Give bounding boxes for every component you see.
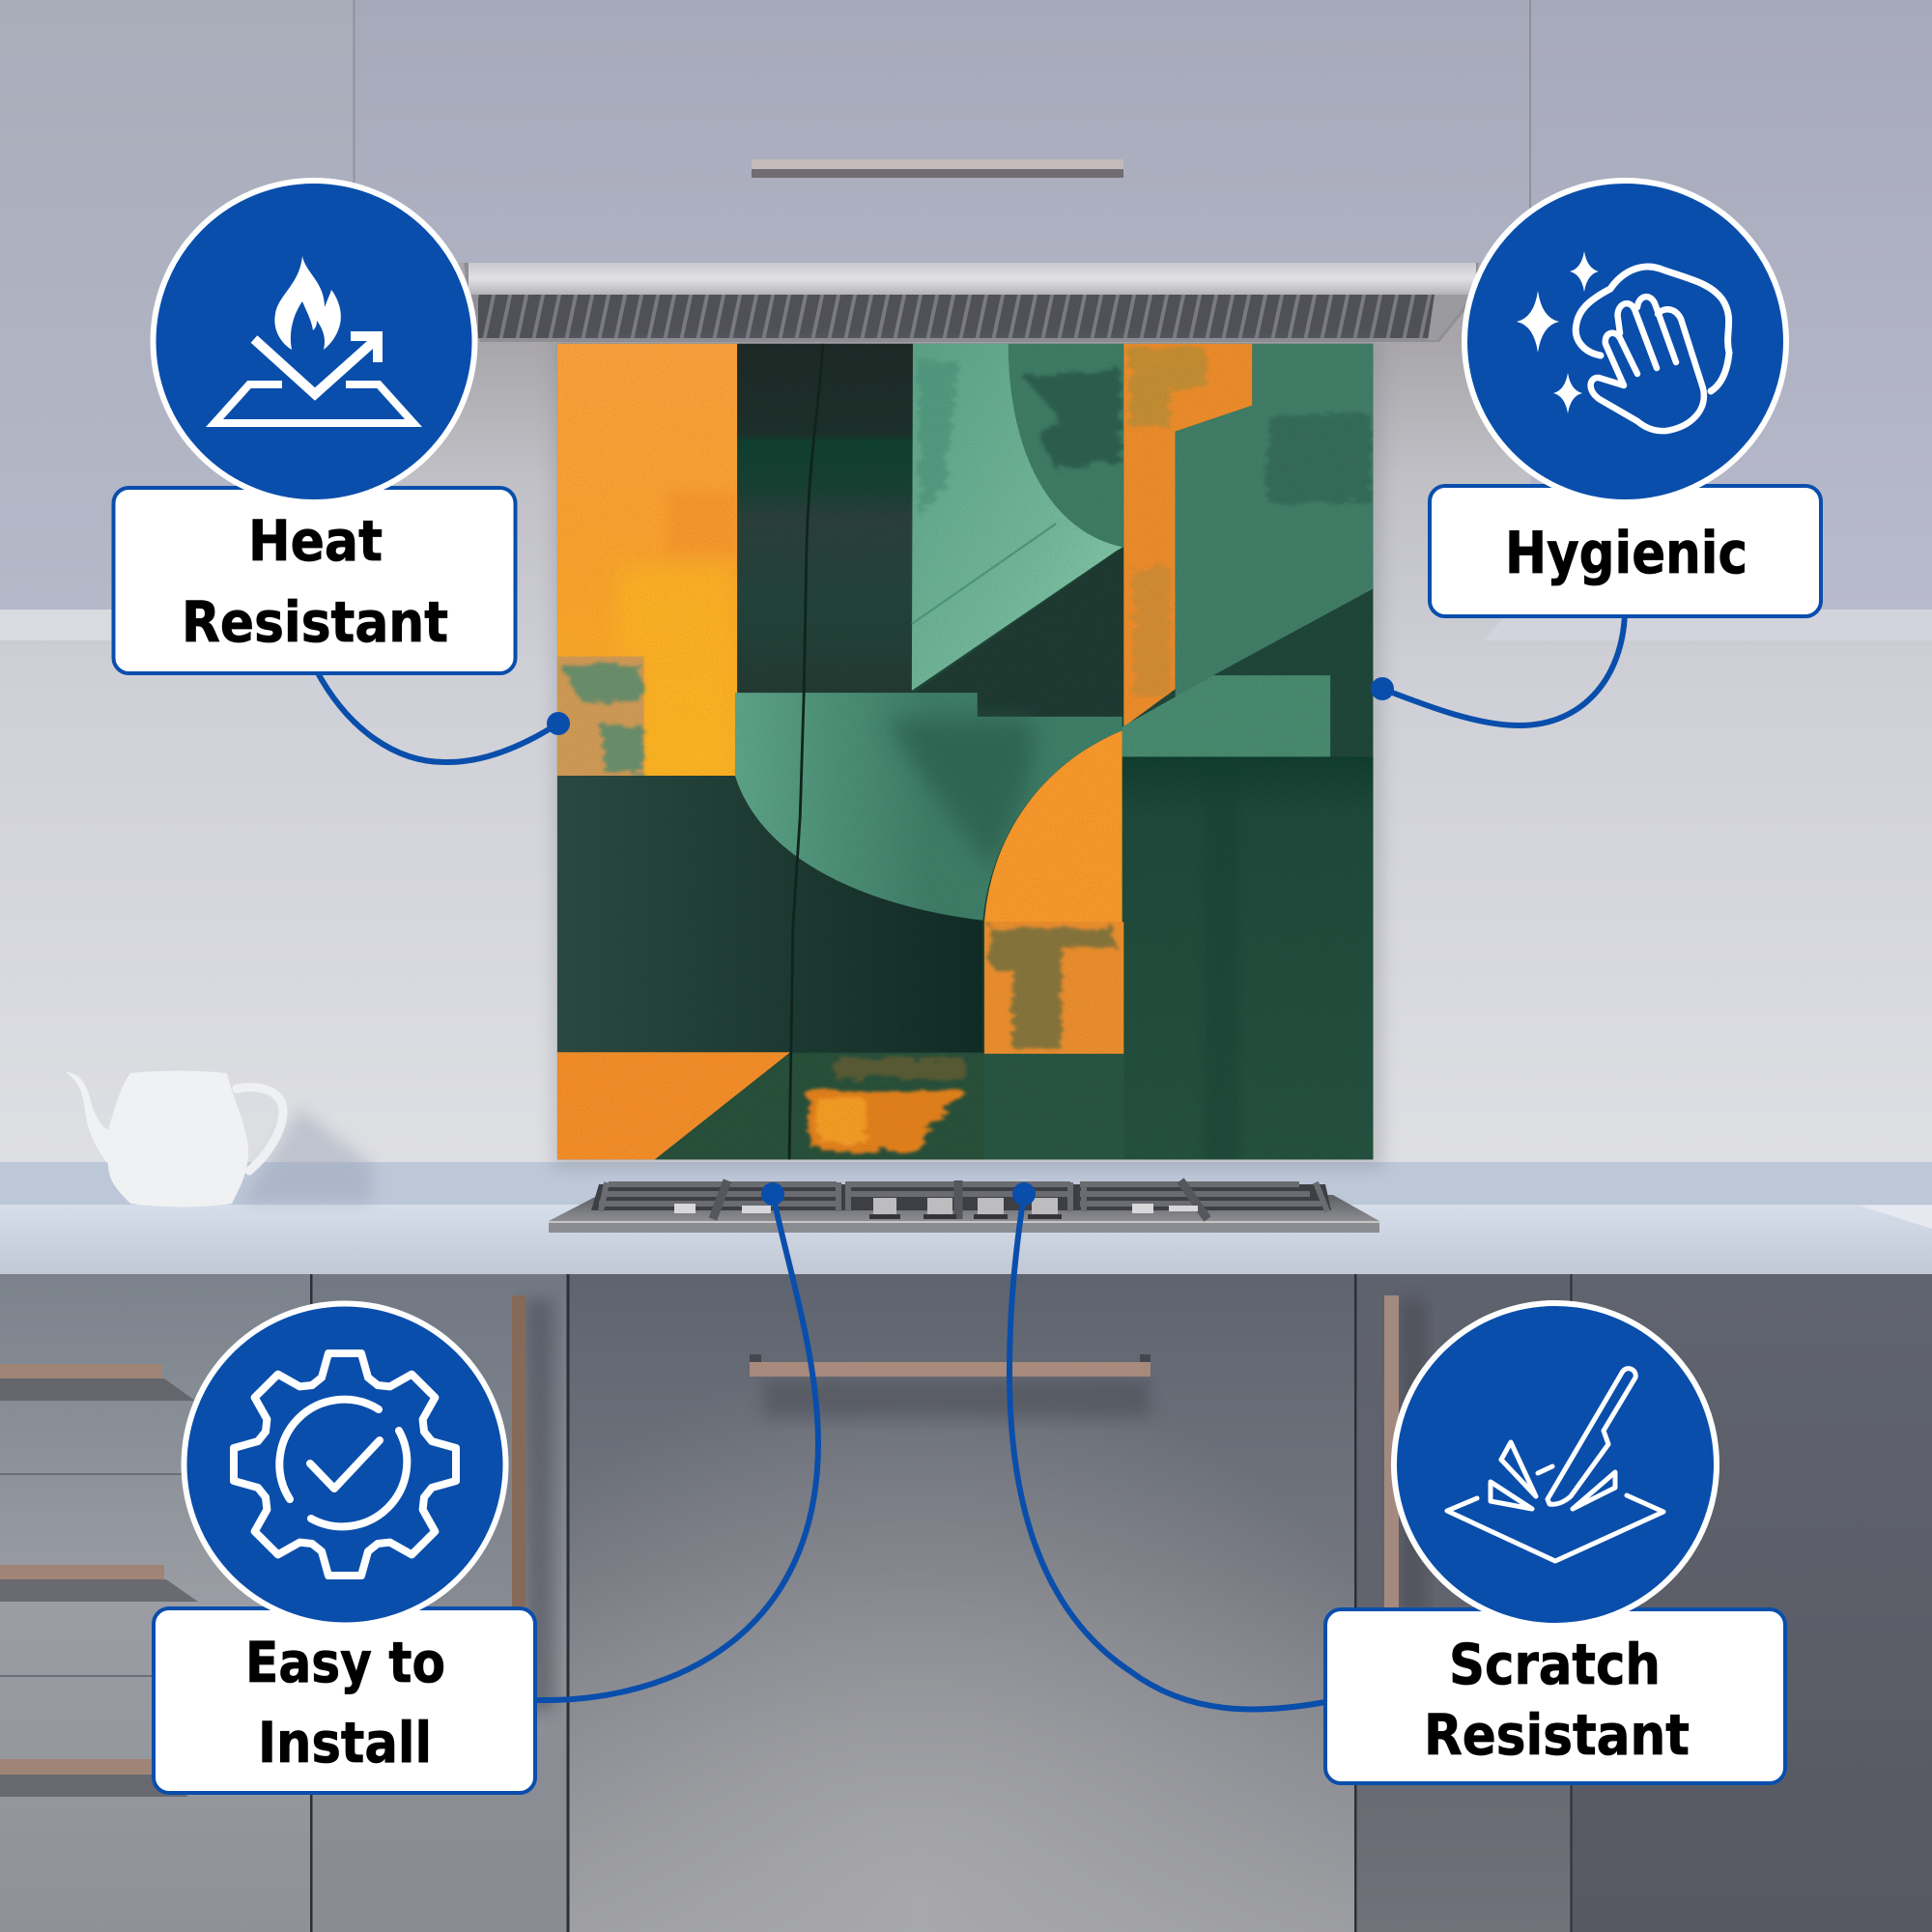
right lower shadow band xyxy=(1205,779,1237,1159)
label text: Resistant xyxy=(1424,1702,1690,1768)
wall xyxy=(0,263,1932,1190)
counter corner highlight xyxy=(1860,1206,1932,1229)
centre grate xyxy=(845,1180,1072,1219)
label text: Easy to xyxy=(245,1630,445,1695)
strip green scuff xyxy=(1129,348,1205,426)
label box xyxy=(154,1608,535,1793)
connector: hygienic xyxy=(1371,612,1625,725)
connector: easy to install xyxy=(538,1182,818,1700)
lower left dark field xyxy=(557,776,982,1052)
yellow brush area xyxy=(620,570,738,713)
icon: knife scratching surface xyxy=(1447,1369,1663,1561)
mint curved shape xyxy=(912,344,1122,691)
right cabinet underside xyxy=(1483,610,1932,640)
callout: hygienic xyxy=(1430,181,1821,616)
label text: Scratch xyxy=(1449,1632,1661,1697)
label box xyxy=(1430,486,1821,616)
lower cabinets xyxy=(0,1274,1932,1932)
orange arch xyxy=(984,730,1122,923)
mint streak shadow xyxy=(918,361,958,518)
upper cabinet right xyxy=(1531,0,1932,611)
base dark green xyxy=(557,344,1373,1159)
orange brush area xyxy=(670,496,738,551)
crack line xyxy=(789,344,823,1159)
label text: Heat xyxy=(248,508,383,574)
right green panel xyxy=(1176,344,1373,697)
cabinet seam left xyxy=(354,0,355,263)
badge circle xyxy=(184,1304,506,1625)
dark central block xyxy=(737,344,914,694)
icon: hand wiping with sparkles xyxy=(1517,251,1729,431)
hob body xyxy=(549,1195,1379,1233)
bottom left orange triangle xyxy=(557,1052,790,1159)
knobs xyxy=(869,1198,1062,1219)
callout: heat resistant xyxy=(114,181,516,673)
badge circle xyxy=(153,181,475,502)
ring and check xyxy=(279,1400,407,1526)
range hood xyxy=(464,263,1478,342)
label text: Install xyxy=(258,1710,432,1776)
upper cabinet left xyxy=(0,0,355,611)
bottom right green xyxy=(983,1054,1123,1159)
upper handle xyxy=(752,159,1123,178)
abstract painting splashback xyxy=(557,344,1373,1159)
upper cabinet centre xyxy=(355,0,1531,263)
badge circle xyxy=(1394,1303,1717,1626)
hob front lip xyxy=(549,1222,1379,1233)
left cabinet underside xyxy=(0,610,377,640)
label box xyxy=(114,488,516,673)
left grate xyxy=(599,1180,838,1219)
bottom upper orange flecks xyxy=(834,1058,964,1079)
counter back xyxy=(0,1162,1932,1206)
lower right dark panel xyxy=(1122,756,1373,1159)
left orange column xyxy=(557,344,737,776)
icon: gear with checkmark xyxy=(234,1353,456,1576)
bowl dark shading xyxy=(888,719,1034,870)
hob recess xyxy=(591,1184,1331,1210)
orange vertical strip xyxy=(1123,344,1252,726)
painting shadow xyxy=(553,340,1383,1169)
bottom orange scuff highlight xyxy=(814,1098,867,1145)
paint grain texture xyxy=(557,344,1373,1159)
bottom dark green field xyxy=(655,1053,983,1159)
callout: scratch resistant xyxy=(1325,1303,1785,1783)
counter top xyxy=(0,1205,1932,1274)
mint crease line xyxy=(912,524,1056,624)
mottled orange block xyxy=(984,923,1123,1054)
upper green panel xyxy=(1008,344,1123,550)
green bowl xyxy=(735,693,1122,921)
connector: scratch resistant xyxy=(1009,1182,1325,1710)
green band xyxy=(1122,675,1330,756)
connector: heat resistant xyxy=(316,669,570,762)
cabinet seam right xyxy=(1529,0,1531,263)
strip lower scuff xyxy=(1132,567,1170,697)
gear outline xyxy=(234,1353,456,1576)
hob rim highlight xyxy=(549,1221,1379,1223)
label box xyxy=(1325,1609,1785,1783)
hob xyxy=(549,1180,1379,1233)
right grate xyxy=(1080,1180,1327,1219)
bottom orange scuff xyxy=(807,1091,964,1150)
teapot shadow xyxy=(242,1109,372,1203)
label text: Resistant xyxy=(182,589,448,655)
dark triangle xyxy=(914,547,1123,717)
callout: easy to install xyxy=(154,1304,535,1793)
cabinet handles xyxy=(0,1295,1426,1797)
burner highlights xyxy=(674,1204,1198,1213)
icon: flame over surface with arrow xyxy=(214,256,413,423)
badge circle xyxy=(1464,181,1786,502)
teapot xyxy=(66,1070,283,1208)
teal patch xyxy=(557,657,644,776)
dark blotch xyxy=(1023,369,1122,469)
right panel dark scuff xyxy=(1267,415,1371,502)
label text: Hygienic xyxy=(1505,520,1747,587)
